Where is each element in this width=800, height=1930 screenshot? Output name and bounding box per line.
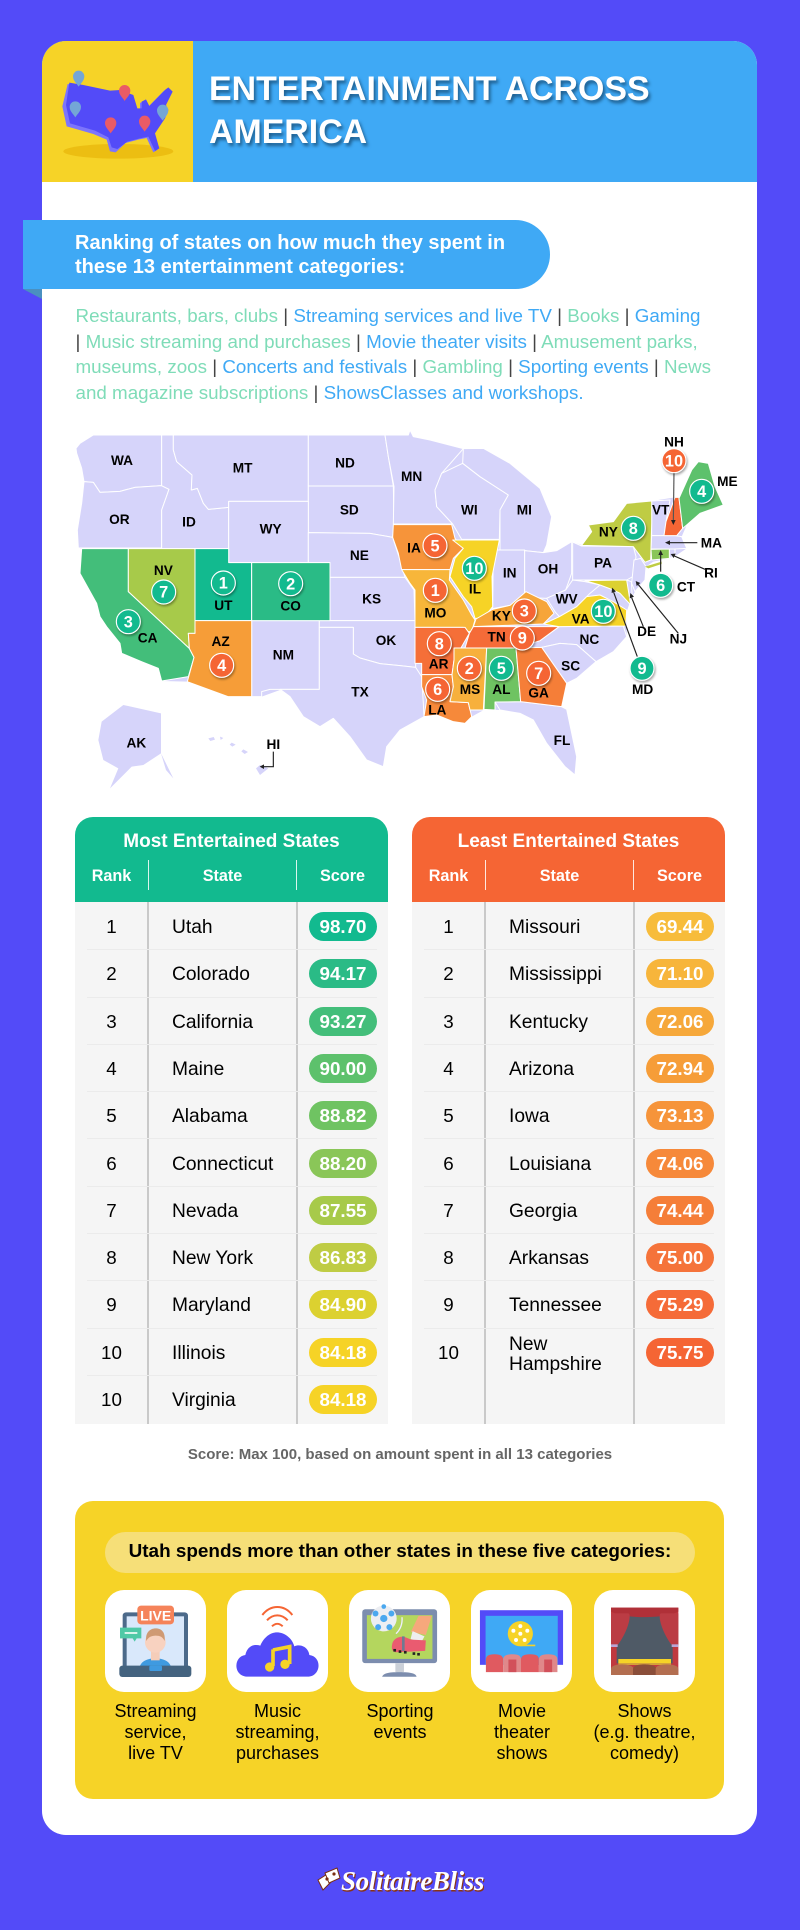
NV [128,549,195,648]
SC [542,643,596,683]
FL [495,702,577,775]
caption: streaming [114,1701,197,1763]
state labels: TN [488,630,506,645]
row: Georgia: 74.44 [656,1200,704,1221]
badge: TN 9 [510,626,534,650]
NE [308,533,405,577]
badge: TN 9: 9 [518,630,527,648]
icon: theatre stage [594,1590,695,1692]
badge: AZ 4: 4 [217,657,226,675]
KS [330,577,415,621]
state labels: UT [214,598,233,613]
caption: music [235,1701,320,1763]
header band [42,41,757,182]
icon: live streaming: LIVE [140,1608,171,1624]
score footnote: Score: Max 100, based on amount spent in all 13 categories [188,1446,612,1463]
row: Mississippi: 71.10 [656,963,704,984]
row: Missouri: Missouri [509,917,580,938]
state labels: CT [677,580,696,595]
row: Illinois: 84.18 [320,1342,366,1363]
badge: KY 3: 3 [520,603,529,621]
row: New York: 86.83 [320,1247,366,1268]
logo: Solitaire Bliss [317,1866,484,1896]
NH [664,497,683,536]
ribbon fold [23,289,42,299]
title: AMERICA [209,113,367,151]
row: Maryland [87,1290,377,1329]
badge: CT 6 [649,573,673,597]
row: California: California [172,1012,253,1033]
icon: movie theater [471,1590,572,1692]
PA [573,542,636,580]
category list: Restaurants, bars, clubs | Streaming services and live TV | Books | Gaming [76,305,700,326]
state labels: LA [428,702,447,717]
ranked states [80,462,723,723]
table header: Score [657,867,702,885]
row: Arkansas [424,1243,714,1281]
row: New York: New York [172,1248,253,1269]
row: Illinois: Illinois [172,1343,225,1364]
MA [651,536,687,549]
states [76,430,687,788]
state labels: WY [260,521,282,536]
caption: movie: theater [494,1722,550,1742]
ND [308,435,393,486]
row: Georgia: 7 [443,1200,454,1221]
state labels: NH [664,435,684,450]
icon: sporting events [349,1590,450,1692]
state labels: RI [704,565,718,580]
row: Virginia: Virginia [172,1390,236,1411]
CA [80,549,194,681]
row: Colorado [87,959,377,998]
OR [77,482,169,548]
badge: NY 8 [621,516,645,540]
TN [465,627,559,648]
table header [412,817,725,902]
row: Mississippi [424,959,714,998]
badge: MS 2 [457,656,481,680]
state labels: MA [701,535,722,550]
state labels: KS [362,591,381,606]
badge: CT 6: 6 [656,577,665,595]
badge: VA 10 [591,599,615,623]
row: Colorado: 2 [106,963,117,984]
row: Mississippi: Mississippi [509,964,602,985]
badge: UT 1: 1 [219,575,228,593]
row: Nevada [87,1196,377,1234]
badge: MO 1 [423,578,447,602]
row: Louisiana [424,1149,714,1187]
row: New Hampshire: 10 [438,1342,459,1363]
state labels: WI [461,502,478,517]
row: Alabama [87,1101,377,1139]
state labels: NY [599,524,618,539]
AK [98,705,173,788]
ribbon heading [23,220,550,289]
row: Tennessee: 75.29 [656,1294,704,1315]
row: Arkansas: 75.00 [656,1247,704,1268]
badge: AR 8: 8 [435,635,444,653]
row: Arizona: Arizona [509,1059,574,1080]
row: Illinois [87,1338,377,1376]
state labels: WA [111,453,133,468]
row: New York [87,1243,377,1281]
row: Maryland: 9 [106,1294,117,1315]
badge: MS 2: 2 [465,660,474,678]
KY [473,592,554,627]
title: ENTERTAINMENT ACROSS [209,70,650,108]
badge: NY 8: 8 [629,520,638,538]
row: Maine: 4 [106,1058,117,1079]
badge: CO 2: 2 [286,575,295,593]
caption: shows: (e.g. theatre, [593,1722,696,1742]
table: least entertained states [412,817,725,1424]
state labels: AZ [212,634,230,649]
row: Virginia: 84.18 [320,1389,366,1410]
WI [435,463,508,539]
ME [679,462,723,528]
badge: CO 2 [279,572,303,596]
row: Iowa: 5 [443,1105,454,1126]
row: Louisiana: 74.06 [656,1152,704,1174]
badge: LA 6: 6 [433,681,442,699]
badge: IL 10 [462,556,486,580]
Long Island [645,562,662,568]
table header: Most Entertained States [123,831,340,852]
caption: movie: Movie [498,1701,546,1721]
caption: shows [593,1701,696,1763]
state labels: ID [182,515,196,530]
badge: CA 3: 3 [124,613,133,631]
state labels: IL [469,581,481,596]
state labels: WV [556,591,579,606]
DE [627,580,632,600]
category list [76,305,711,403]
icon: music cloud [227,1590,328,1692]
row: Connecticut: 88.20 [320,1152,366,1174]
state labels: VA [572,611,590,626]
badge: NH 10 [662,449,686,473]
badge: IA 5 [423,534,447,558]
state labels: MN [401,469,422,484]
row: Iowa [424,1101,714,1139]
row: Kentucky [424,1007,714,1045]
row: Alabama: 88.82 [320,1105,366,1126]
badge: ME 4: 4 [697,483,706,501]
Utah heading pill: Utah spends more than other states in these five categories: [129,1541,671,1562]
row: Alabama: Alabama [172,1106,248,1127]
state labels: ME [717,474,738,489]
badge: NH 10: 10 [665,452,683,470]
row: Connecticut [87,1149,377,1187]
heading text: these 13 entertainment categories: [75,256,405,278]
caption: streaming: live TV [128,1743,183,1763]
icon: live streaming [105,1590,206,1692]
row: Kentucky: 3 [443,1011,454,1032]
row: Arizona: 4 [443,1058,454,1079]
table header: Rank [429,867,468,885]
NM [252,621,319,697]
badge: KY 3 [512,599,536,623]
row: Maine: Maine [172,1059,224,1080]
state labels: KY [492,609,511,624]
MO [402,570,475,632]
state labels: ND [335,456,355,471]
row: Missouri: 69.44 [656,916,704,937]
row: New York: 8 [106,1247,117,1268]
row: Maine: 90.00 [320,1058,366,1079]
panel: Utah top categories [75,1501,724,1799]
VA [543,595,627,627]
row: New Hampshire: New [509,1334,547,1355]
IL [450,540,499,618]
badge: NV 7: 7 [159,584,168,602]
category list: and magazine subscriptions | ShowsClasses and workshops. [76,382,584,403]
caption: music: purchases [236,1743,319,1763]
state labels: OK [376,633,396,648]
table header: State [203,867,242,885]
row: Colorado: Colorado [172,964,250,985]
state labels: HI [267,737,280,752]
row: Illinois: 10 [101,1342,122,1363]
badge: IA 5: 5 [430,537,440,555]
state labels: PA [594,556,612,571]
row: Arizona: 72.94 [656,1058,704,1079]
row: Kentucky: Kentucky [509,1012,588,1033]
row: California: 3 [106,1011,117,1032]
row: Kentucky: 72.06 [656,1011,704,1032]
row: Tennessee: Tennessee [509,1295,602,1316]
row: Nevada: Nevada [172,1201,238,1222]
state labels: NJ [670,631,687,646]
state labels: TX [351,685,369,700]
header icon panel [42,41,193,182]
badge: AL 5 [489,656,513,680]
row: Missouri: 1 [443,916,454,937]
state labels: VT [652,502,670,517]
MN [385,430,463,524]
NC [517,626,627,662]
state labels: SD [340,502,359,517]
state labels: AK [126,736,146,751]
badge: AZ 4 [210,653,234,677]
heading text: Ranking of states on how much they spent in [75,232,505,254]
row: Nevada: 7 [106,1200,117,1221]
table header: Rank [92,867,131,885]
row: California [87,1007,377,1045]
state labels: AR [429,657,449,672]
AL [484,648,521,710]
row: Nevada: 87.55 [320,1200,366,1221]
row: Virginia [101,1385,377,1414]
caption: streaming: service, [124,1722,186,1742]
NY [582,501,652,562]
state labels: SC [561,659,580,674]
badge: MO 1: 1 [431,582,440,600]
MD [585,580,631,605]
row: Utah: Utah [172,917,213,938]
caption: shows: Shows [617,1701,672,1721]
table header: State [540,867,579,885]
state labels: NM [273,647,294,662]
row: Louisiana: Louisiana [509,1154,591,1174]
UT [195,549,252,621]
icon: playing cards [317,1867,341,1891]
NJ [632,558,646,592]
LA [422,675,472,723]
state labels: MI [517,502,532,517]
TX [280,627,424,767]
badge: AR 8 [427,632,451,656]
row: Tennessee: 9 [443,1294,454,1315]
badge: IL 10: 10 [465,560,483,578]
WA [76,435,162,492]
state labels: MT [233,461,253,476]
row: Virginia: 10 [101,1389,122,1410]
logo text: SolitaireBliss [341,1866,484,1896]
OK [319,621,416,667]
WV [547,580,600,617]
row: New Hampshire: 75.75 [656,1342,704,1363]
table header [75,817,388,902]
row: Arkansas: Arkansas [509,1248,589,1269]
row: Alabama: 5 [106,1105,117,1126]
row: Maryland: Maryland [172,1295,251,1316]
row: Connecticut: 6 [106,1152,117,1174]
caption: music: Music [254,1701,301,1721]
state labels: CO [280,599,301,614]
MI [463,448,552,553]
state labels: CA [138,631,158,646]
row: Louisiana: 6 [443,1152,454,1174]
state labels: AL [492,682,510,697]
row: Missouri [424,912,714,950]
state labels: OR [109,512,130,527]
caption: sporting: events [373,1722,427,1742]
badge: CA 3 [116,610,140,634]
badge: UT 1 [211,571,235,595]
row: Iowa: Iowa [509,1106,550,1127]
heading text [75,232,505,278]
caption: sporting: Sporting [366,1701,434,1721]
caption: movie [494,1701,550,1763]
badge: MD 9 [630,656,654,680]
row: Arkansas: 8 [443,1247,454,1268]
WY [229,501,308,563]
state labels: GA [528,686,549,701]
callout arrows [260,472,705,769]
row: Colorado: 94.17 [320,963,366,984]
badge: VA 10: 10 [594,603,612,621]
row: Maine [87,1054,377,1092]
IN [493,550,525,609]
state labels: MS [460,682,480,697]
row: Utah: 98.70 [320,916,366,937]
row: New Hampshire: Hampshire [509,1354,602,1375]
state labels: OH [538,561,558,576]
MS [450,648,487,710]
SD [308,486,394,537]
row: Connecticut: Connecticut [172,1154,273,1174]
state labels: IN [503,565,516,580]
row: Utah [87,912,377,950]
AR [415,627,469,675]
row: Arizona [424,1054,714,1092]
badge: AL 5: 5 [497,660,506,678]
row: Georgia: Georgia [509,1201,577,1222]
contiguous US underlay [76,430,723,775]
badge: NV 7 [152,580,176,604]
caption: movie: shows [496,1743,548,1763]
table header: Score [320,867,365,885]
badge: LA 6 [426,677,450,701]
IA [393,525,463,570]
RI [669,549,675,557]
CT [651,549,669,560]
table header: Least Entertained States [458,831,679,852]
Utah heading pill [105,1532,695,1573]
state labels: FL [554,733,570,748]
OH [525,542,572,598]
state labels: NE [350,548,369,563]
state labels: NC [579,632,599,647]
caption: shows: comedy) [610,1743,679,1763]
row: Tennessee [424,1290,714,1329]
caption: streaming: Streaming [114,1701,197,1721]
icon: USA map with pins [62,70,174,158]
state labels: NV [154,563,174,578]
badge: ME 4 [690,479,714,503]
AZ [187,621,252,697]
HI [208,737,268,775]
row: Iowa: 73.13 [656,1105,704,1126]
title [209,70,652,151]
state labels [109,435,738,752]
GA [516,647,567,707]
category list: museums, zoos | Concerts and festivals | Gambling | Sporting events | News [76,356,711,377]
VT [652,500,670,536]
category list: | Music streaming and purchases | Movie theater visits | Amusement parks, [76,331,698,352]
state labels: DE [637,624,656,639]
rank badges [116,449,714,701]
CO [252,563,330,621]
state labels: MO [424,605,447,620]
state labels: MD [632,682,653,697]
row: Mississippi: 2 [443,963,454,984]
row: California: 93.27 [320,1011,366,1032]
state labels: IA [407,541,421,556]
badge: GA 7: 7 [534,665,543,683]
badge: MD 9: 9 [637,660,647,678]
MT [173,435,308,509]
row: Georgia [424,1196,714,1234]
table: most entertained states [75,817,388,1424]
caption: sporting [366,1701,434,1742]
caption: music: streaming, [235,1722,320,1742]
badge: GA 7 [527,661,551,685]
row: Maryland: 84.90 [320,1294,366,1315]
US map [76,432,738,788]
row: Utah: 1 [106,916,117,937]
row: New Hampshire [438,1334,714,1375]
ID [162,435,229,549]
